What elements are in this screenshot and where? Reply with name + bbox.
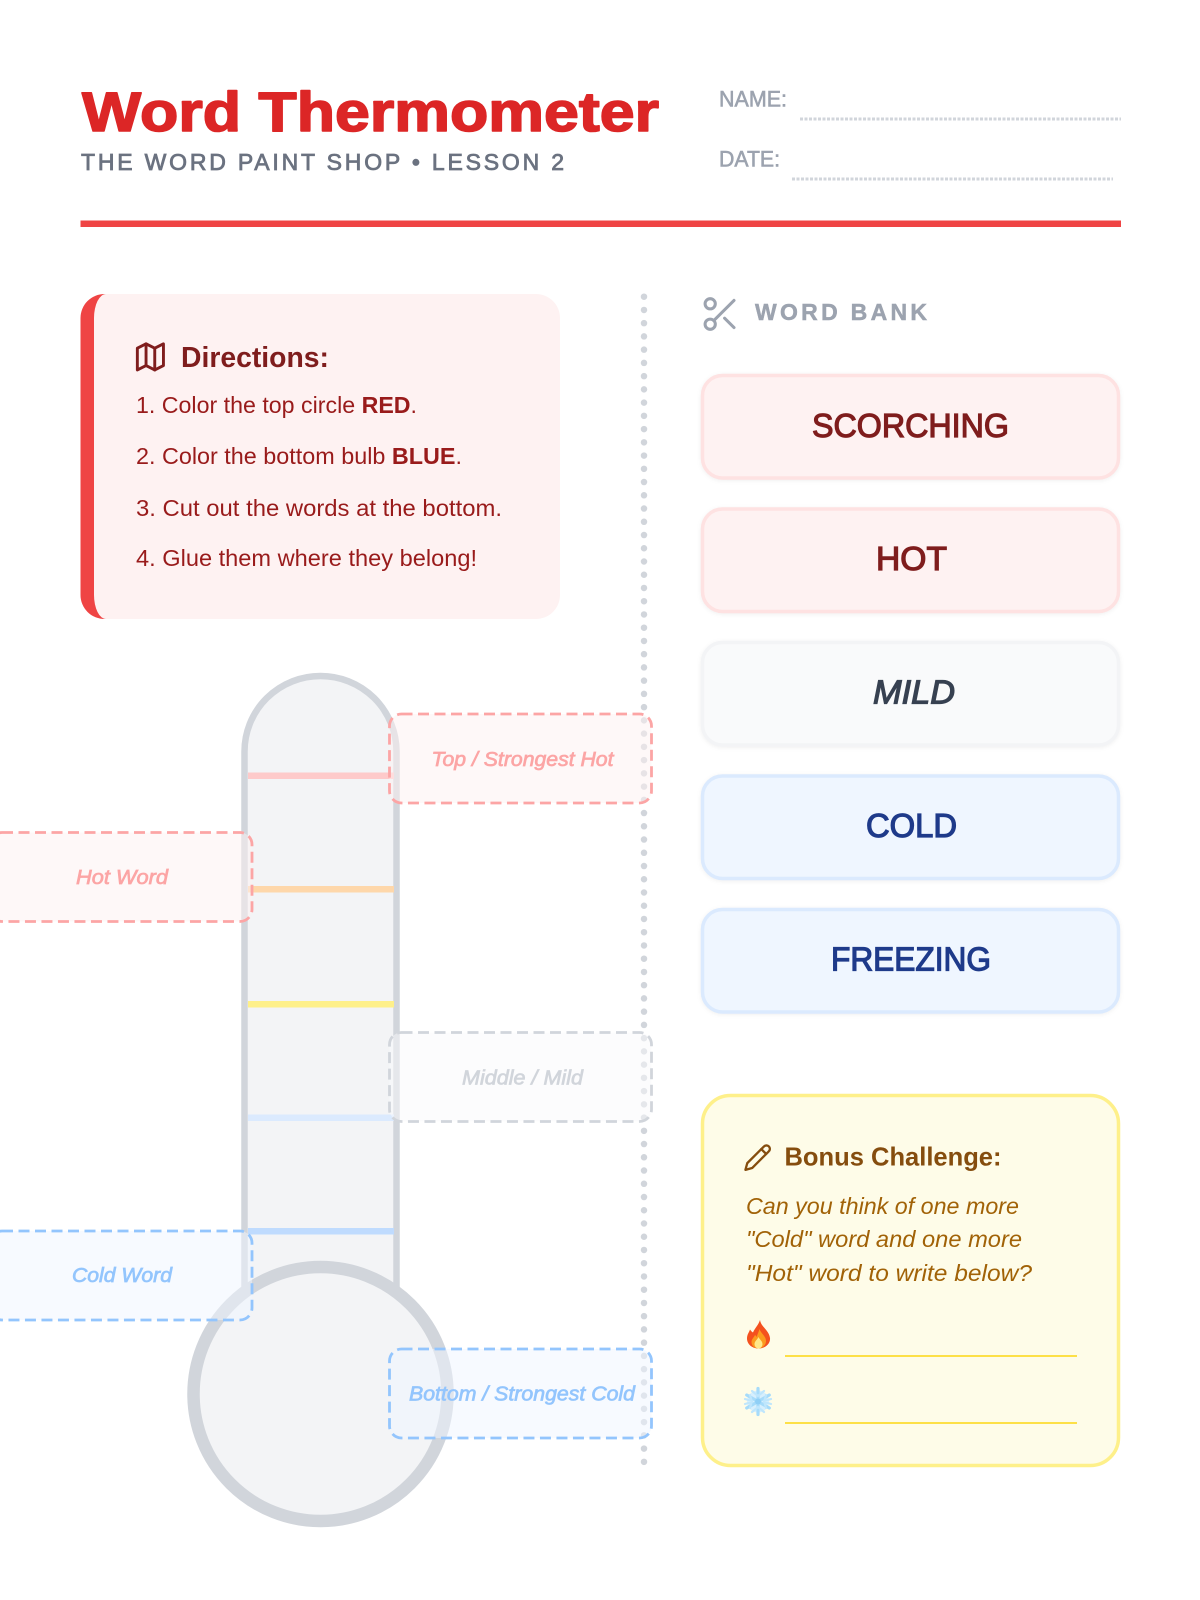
word card: scorching [702, 376, 1118, 478]
word bank label: WORD BANK [755, 299, 927, 325]
word card: scorching: SCORCHING [812, 407, 1009, 444]
glue slot: middle / mild: Middle / Mild [462, 1068, 584, 1090]
step 1: 1. Color the top circle RED. [136, 392, 417, 418]
thermometer [194, 676, 448, 1521]
thermometer tube [244, 676, 396, 1305]
step 2: 2. Color the bottom bulb BLUE. [136, 443, 462, 469]
word card: freezing [702, 910, 1118, 1012]
word card: mild [702, 642, 1118, 745]
word card: cold [702, 776, 1118, 878]
writing line: hot [785, 1355, 1077, 1357]
glue slot: top / strongest hot: Top / Strongest Hot [432, 749, 615, 771]
bonus question: "Cold" word and one more [746, 1226, 1022, 1252]
bonus question [746, 1193, 1032, 1286]
glue slot: bottom / strongest cold: Bottom / Strongest Cold [409, 1384, 636, 1406]
tick marks [248, 772, 394, 1234]
bonus question: "Hot" word to write below? [746, 1260, 1032, 1286]
name field: NAME: [719, 86, 787, 112]
word card: mild: MILD [873, 674, 955, 710]
icon: scissors [705, 299, 734, 329]
word card: hot [702, 509, 1118, 612]
word card: cold: COLD [866, 807, 957, 844]
step 4: 4. Glue them where they belong! [136, 545, 477, 571]
cut line [641, 297, 647, 1463]
icon: snowflake [745, 1388, 771, 1414]
header [80, 80, 1121, 227]
glue slot: bottom / strongest cold [390, 1349, 652, 1438]
title: Word Thermometer [82, 80, 659, 143]
bonus question: Can you think of one more [746, 1193, 1019, 1219]
word card: freezing: FREEZING [831, 940, 991, 978]
word card: hot: HOT [876, 540, 947, 577]
step 3: 3. Cut out the words at the bottom. [136, 495, 502, 521]
writing line: cold [785, 1422, 1077, 1424]
header rule [80, 220, 1121, 227]
word bank heading [705, 299, 927, 329]
thermometer bulb [194, 1267, 448, 1521]
bonus heading: Bonus Challenge: [784, 1142, 1002, 1172]
icon: fire [747, 1320, 770, 1348]
date field: DATE: [719, 146, 780, 172]
glue slot: hot word [0, 832, 252, 922]
glue slot: middle / mild [390, 1032, 652, 1122]
subtitle: THE WORD PAINT SHOP • LESSON 2 [81, 149, 564, 175]
icon: pencil [745, 1145, 770, 1170]
heading: directions: Directions: [181, 342, 329, 374]
glue slot: cold word [0, 1231, 252, 1320]
icon: map [137, 344, 163, 370]
glue slot: cold word: Cold Word [72, 1265, 173, 1287]
glue slot: hot word: Hot Word [76, 867, 169, 889]
panel: directions [80, 294, 560, 619]
glue slot: top / strongest hot [390, 714, 652, 803]
panel: bonus challenge [702, 1096, 1118, 1466]
